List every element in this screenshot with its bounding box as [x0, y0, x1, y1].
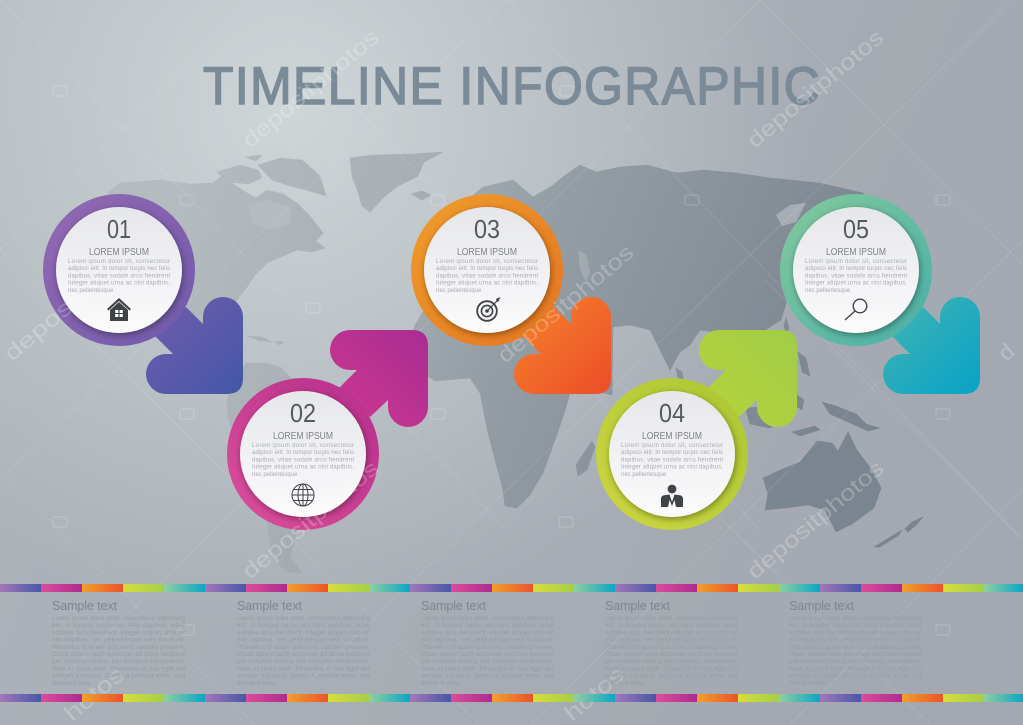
column 2 body: Nam ac justo ante. Phasellus in nisi eget leo	[237, 665, 370, 672]
column 3 body: tincidunt odio.	[421, 680, 461, 687]
column 1 body: sodales arcu hendrerit. Integer aliquet urna ac	[52, 629, 186, 636]
map: arctic islands	[217, 155, 326, 196]
map: caribbean	[247, 336, 284, 345]
watermark text: hotos	[559, 662, 629, 725]
body 01: nec pellentesque	[68, 288, 114, 294]
text column 1	[52, 599, 186, 687]
column 4 body	[605, 615, 739, 687]
column 4 body: sodales arcu hendrerit. Integer aliquet urna ac	[605, 629, 739, 636]
column 1 body	[52, 615, 186, 687]
column 5 body: semper tincidunt. Donec a porttitor enim, sed	[789, 673, 922, 680]
column 1 body: Phasellus id quam quis nunc sodales posuere.	[52, 644, 185, 651]
map: sumatra and malay	[676, 368, 684, 382]
ring 01	[43, 194, 195, 346]
column 1 body: nisi dapibus, nec pellentesque velit tincidunt.	[52, 637, 185, 644]
column 5 body: Class aptent taciti sociosqu ad litora torquent	[789, 651, 922, 658]
column 5 heading: Sample text	[789, 599, 855, 613]
body 04: nec pellentesque	[621, 472, 667, 478]
column 4 heading: Sample text	[605, 599, 671, 613]
arrow 05	[883, 297, 980, 394]
map: eurasia	[450, 165, 880, 395]
arrow 03	[514, 297, 611, 394]
map: okhotsk sea	[776, 203, 806, 226]
column 3 body: sodales arcu hendrerit. Integer aliquet urna ac	[421, 629, 555, 636]
body 05: adipisci elit. In tempor turpis nec felis	[805, 266, 907, 272]
column 1 heading: Sample text	[52, 599, 118, 613]
column 4 body: Nam ac justo ante. Phasellus in nisi eget leo	[605, 665, 738, 672]
body 05: Lorem ipsum dolor sit, consectetur	[805, 259, 907, 265]
watermark text: d	[993, 338, 1019, 366]
map: japan	[784, 318, 789, 334]
map: africa	[408, 300, 596, 508]
map: greenland	[350, 152, 443, 212]
column 2 body: per conubia nostra, per inceptos himenaeos.	[237, 658, 370, 665]
body 01: Integer aliquet urna ac nisi dapibus,	[68, 281, 170, 287]
map: new zealand	[874, 517, 923, 547]
ring 04	[596, 378, 748, 530]
column 5 body: Nam ac justo ante. Phasellus in nisi eget leo	[789, 665, 922, 672]
column 1 body: per conubia nostra, per inceptos himenaeos.	[52, 658, 185, 665]
body 02: adipisci elit. In tempor turpis nec felis	[252, 450, 354, 456]
column 2 body: sodales arcu hendrerit. Integer aliquet urna ac	[237, 629, 371, 636]
column 4 body: tincidunt odio.	[605, 680, 645, 687]
map: new guinea	[822, 402, 880, 431]
column 3 body: Nam ac justo ante. Phasellus in nisi eget leo	[421, 665, 554, 672]
step 05	[780, 194, 980, 394]
watermark text: depositphotos	[237, 24, 383, 153]
map: madagascar	[576, 441, 595, 476]
ring 05	[780, 194, 932, 346]
body 05: Integer aliquet urna ac nisi dapibus,	[805, 281, 907, 287]
column 5 body: tincidunt odio.	[789, 680, 829, 687]
map: hudson bay	[248, 200, 292, 230]
body 03: Lorem ipsum dolor sit, consectetur	[436, 259, 538, 265]
column 1 body: Lorem ipsum dolor amet, consectetur adipiscing	[52, 615, 185, 622]
text column 5	[789, 599, 923, 687]
body 03: dapibus, vitae sodale arcu hendrerit	[436, 273, 538, 279]
column 1 body: Nam ac justo ante. Phasellus in nisi eget leo	[52, 665, 185, 672]
column 1 body: semper tincidunt. Donec a porttitor enim, sed	[52, 673, 185, 680]
ring 03	[411, 194, 563, 346]
body 04	[621, 443, 723, 478]
face 01	[56, 207, 182, 333]
colour strip top	[0, 584, 1023, 592]
map: south america	[227, 363, 362, 573]
ring 02	[227, 378, 379, 530]
column 4 body: Lorem ipsum dolor amet, consectetur adipiscing	[605, 615, 738, 622]
body 05: nec pellentesque	[805, 288, 851, 294]
arrow 02	[330, 330, 428, 427]
heading 03: LOREM IPSUM	[457, 247, 517, 258]
body 01	[68, 259, 170, 294]
body 02: nec pellentesque	[252, 472, 298, 478]
watermark text: depositphotos	[742, 24, 888, 153]
body 02: Lorem ipsum dolor sit, consectetur	[252, 443, 354, 449]
body 04: dapibus, vitae sodale arcu hendrerit	[621, 457, 723, 463]
column 2 body: Phasellus id quam quis nunc sodales posuere.	[237, 644, 370, 651]
map: australia	[763, 432, 881, 532]
column 5 body: Lorem ipsum dolor amet, consectetur adipiscing	[789, 615, 922, 622]
heading 02: LOREM IPSUM	[273, 431, 333, 442]
map: borneo and indonesia	[745, 395, 820, 436]
column 3 body: per conubia nostra, per inceptos himenaeos.	[421, 658, 554, 665]
column 2 body: nisi dapibus, nec pellentesque velit tincidunt.	[237, 637, 370, 644]
number 03: 03	[474, 214, 500, 244]
body 03: Integer aliquet urna ac nisi dapibus,	[436, 281, 538, 287]
text column 2	[237, 599, 371, 687]
column 3 body: nisi dapibus, nec pellentesque velit tincidunt.	[421, 637, 554, 644]
body 04: adipisci elit. In tempor turpis nec felis	[621, 450, 723, 456]
face 04	[609, 391, 735, 517]
column 5 body	[789, 615, 923, 687]
icon: house	[107, 298, 131, 321]
column 2 body: semper tincidunt. Donec a porttitor enim, sed	[237, 673, 370, 680]
column 1 body: elit. In tempor turpis nec felis dapibus, vitae	[52, 622, 185, 629]
column 4 body: elit. In tempor turpis nec felis dapibus, vitae	[605, 622, 738, 629]
column 2 body	[237, 615, 371, 687]
body 03	[436, 259, 538, 294]
body 02: dapibus, vitae sodale arcu hendrerit	[252, 457, 354, 463]
watermark text: depositphotos	[237, 455, 383, 584]
column 3 body: Lorem ipsum dolor amet, consectetur adipiscing	[421, 615, 554, 622]
column 2 body: elit. In tempor turpis nec felis dapibus, vitae	[237, 622, 370, 629]
column 5 body: nisi dapibus, nec pellentesque velit tincidunt.	[789, 637, 922, 644]
face 02	[240, 391, 366, 517]
body 02: Integer aliquet urna ac nisi dapibus,	[252, 465, 354, 471]
step 02	[227, 330, 428, 530]
watermark text: depositphotos	[492, 239, 638, 368]
column 5 body: elit. In tempor turpis nec felis dapibus, vitae	[789, 622, 922, 629]
column 3 heading: Sample text	[421, 599, 487, 613]
text column 3	[421, 599, 555, 687]
icon: magnifier	[845, 299, 867, 320]
column 5 body: per conubia nostra, per inceptos himenaeos.	[789, 658, 922, 665]
world map	[108, 152, 923, 573]
column 2 heading: Sample text	[237, 599, 303, 613]
number 04: 04	[659, 398, 685, 428]
column 1 body: tincidunt odio.	[52, 680, 92, 687]
column 4 body: semper tincidunt. Donec a porttitor enim, sed	[605, 673, 738, 680]
body 02	[252, 443, 354, 478]
column 2 body: tincidunt odio.	[237, 680, 277, 687]
column 2 body: Class aptent taciti sociosqu ad litora torquent	[237, 651, 370, 658]
column 3 body: Phasellus id quam quis nunc sodales posuere.	[421, 644, 554, 651]
watermark text: hotos	[59, 662, 129, 725]
column 2 body: Lorem ipsum dolor amet, consectetur adipiscing	[237, 615, 370, 622]
number 02: 02	[290, 398, 316, 428]
heading 05: LOREM IPSUM	[826, 247, 886, 258]
body 01: adipisci elit. In tempor turpis nec felis	[68, 266, 170, 272]
step 01	[43, 194, 243, 394]
column 3 body: elit. In tempor turpis nec felis dapibus, vitae	[421, 622, 554, 629]
column 4 body: per conubia nostra, per inceptos himenaeos.	[605, 658, 738, 665]
number 01: 01	[107, 214, 131, 244]
body 01: Lorem ipsum dolor sit, consectetur	[68, 259, 170, 265]
body 04: Integer aliquet urna ac nisi dapibus,	[621, 465, 723, 471]
column 4 body: Phasellus id quam quis nunc sodales posuere.	[605, 644, 738, 651]
icon: target	[477, 297, 500, 321]
text column 4	[605, 599, 739, 687]
column 3 body: Class aptent taciti sociosqu ad litora torquent	[421, 651, 554, 658]
column 4 body: Class aptent taciti sociosqu ad litora torquent	[605, 651, 738, 658]
body 05	[805, 259, 907, 294]
column 5 body: sodales arcu hendrerit. Integer aliquet urna ac	[789, 629, 923, 636]
watermark text: depositphotos	[742, 455, 888, 584]
column 3 body	[421, 615, 555, 687]
colour strip bottom	[0, 694, 1023, 702]
step 03	[411, 194, 611, 394]
column 4 body: nisi dapibus, nec pellentesque velit tincidunt.	[605, 637, 738, 644]
column 3 body: semper tincidunt. Donec a porttitor enim, sed	[421, 673, 554, 680]
body 03: adipisci elit. In tempor turpis nec felis	[436, 266, 538, 272]
body 05: dapibus, vitae sodale arcu hendrerit	[805, 273, 907, 279]
icon: businessman	[661, 485, 683, 507]
watermark camera marks	[53, 86, 950, 635]
arrow 04	[699, 330, 797, 427]
face 03	[424, 207, 550, 333]
arrow 01	[146, 297, 243, 394]
map: caspian lake	[578, 250, 590, 282]
body 01: dapibus, vitae sodale arcu hendrerit	[68, 273, 170, 279]
column 5 body: Phasellus id quam quis nunc sodales posuere.	[789, 644, 922, 651]
face 05	[793, 207, 919, 333]
icon: globe	[292, 484, 314, 506]
watermark text: deposit	[0, 285, 89, 366]
body 04: Lorem ipsum dolor sit, consectetur	[621, 443, 723, 449]
map: philippines	[798, 352, 810, 376]
step 04	[596, 330, 797, 530]
heading 04: LOREM IPSUM	[642, 431, 702, 442]
map: iceland	[411, 191, 431, 200]
map: north america	[108, 175, 325, 348]
number 05: 05	[843, 214, 869, 244]
body 03: nec pellentesque	[436, 288, 482, 294]
title: TIMELINE INFOGRAPHIC	[203, 56, 820, 115]
column 1 body: Class aptent taciti sociosqu ad litora torquent	[52, 651, 185, 658]
heading 01: LOREM IPSUM	[89, 247, 149, 258]
